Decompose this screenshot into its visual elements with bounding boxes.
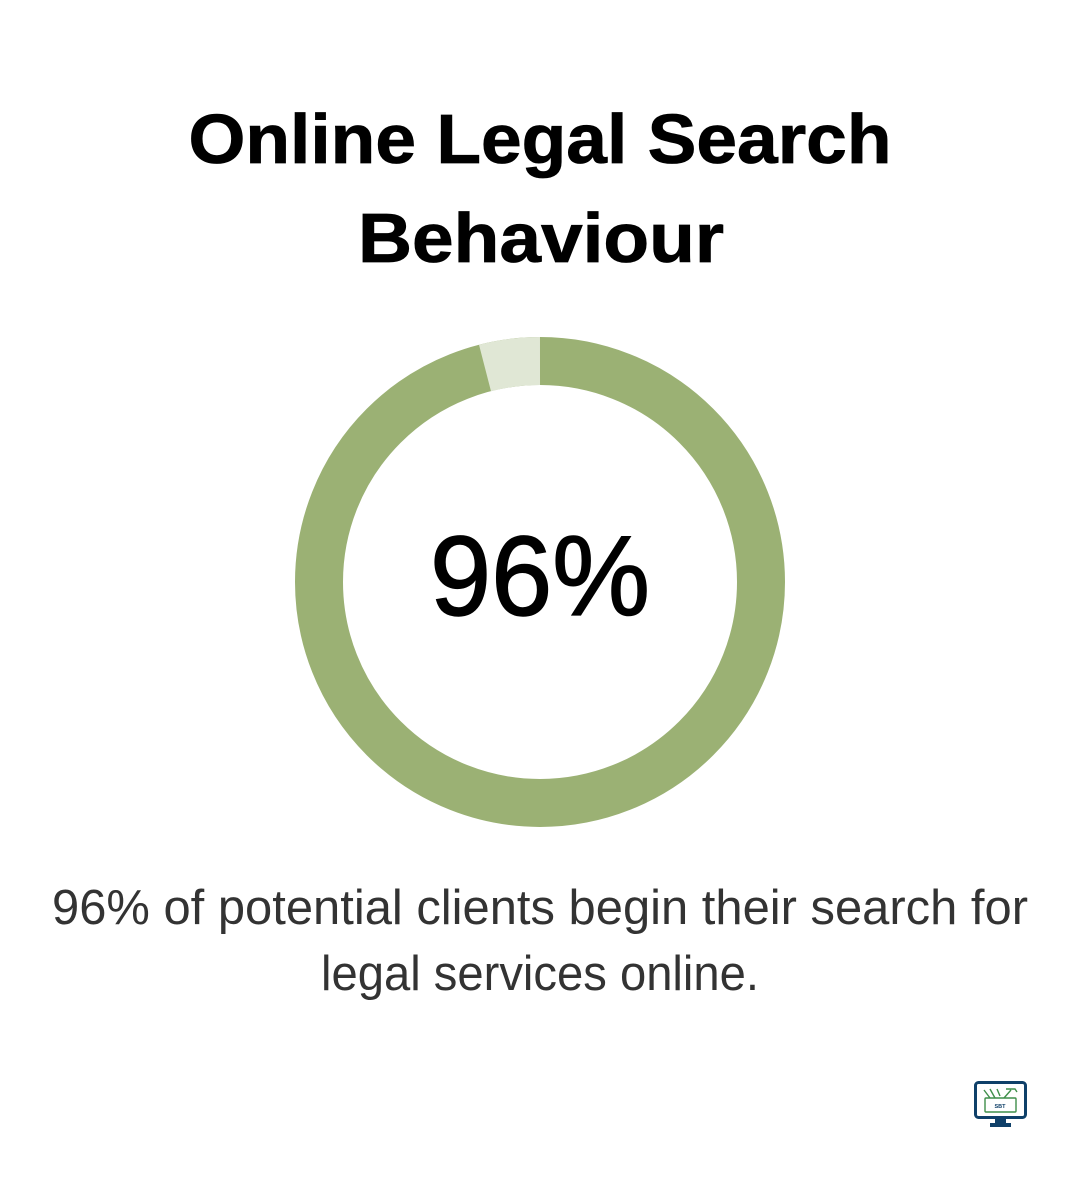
title	[188, 100, 892, 277]
donut centre value: 96%	[430, 513, 650, 639]
title: Behaviour	[358, 199, 724, 277]
description text: legal services online.	[321, 947, 759, 1001]
icon: monitor with toolbox logo	[976, 1082, 1026, 1127]
title: Online Legal Search	[188, 100, 892, 178]
description text	[52, 881, 1028, 1001]
icon: monitor with toolbox logo: SBT	[994, 1104, 1006, 1110]
description text: 96% of potential clients begin their search for	[52, 881, 1028, 935]
donut chart: 96 percent	[319, 361, 761, 803]
